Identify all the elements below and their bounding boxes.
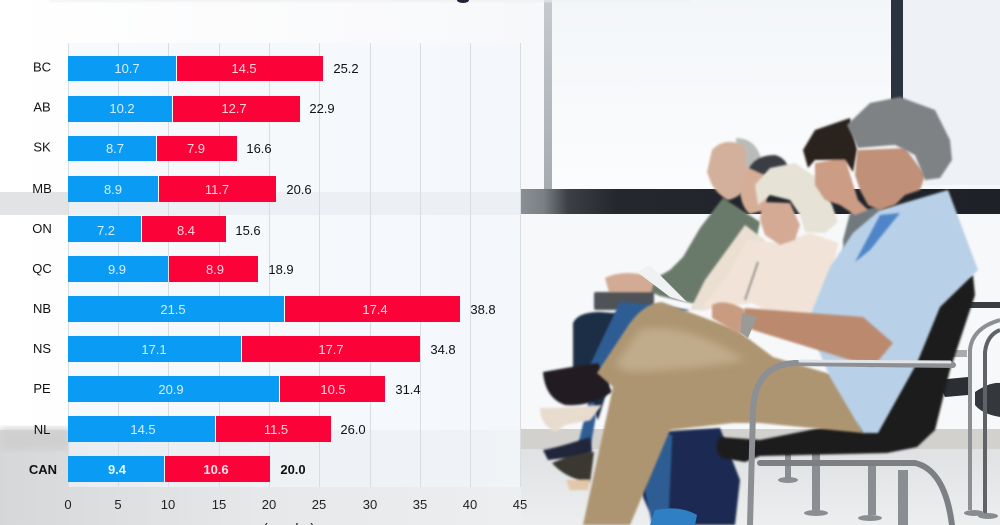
- hair: [847, 97, 952, 180]
- shoes, left: [543, 363, 612, 490]
- row: SK: 7.9: [187, 141, 205, 156]
- row: CAN: [29, 456, 306, 482]
- row: MB: 20.6: [286, 182, 312, 197]
- chair frame: [750, 361, 953, 525]
- title remnant, clipped at top edge: [50, 0, 690, 3]
- x axis labels: 40: [463, 497, 477, 512]
- x axis labels: 15: [212, 497, 226, 512]
- row: QC: 9.9: [108, 262, 126, 277]
- document held: [637, 265, 687, 302]
- x axis labels: 20: [262, 497, 276, 512]
- row: NB: 21.5: [160, 302, 186, 317]
- person: woman with white hair: [700, 163, 838, 322]
- row: QC: QC: [32, 261, 52, 276]
- chair legs, behind: [778, 448, 908, 525]
- row: QC: 8.9: [206, 262, 224, 277]
- hand and watch: [712, 302, 745, 335]
- row: SK: [33, 136, 272, 161]
- floor left: [0, 430, 521, 525]
- x axis labels: 25: [312, 497, 326, 512]
- arm: [740, 308, 893, 367]
- row: PE: 31.4: [395, 382, 421, 397]
- row: NB: NB: [33, 301, 51, 316]
- row: AB: AB: [33, 100, 51, 114]
- row: AB: 12.7: [221, 101, 247, 116]
- row: ON: ON: [32, 221, 52, 236]
- row: PE: 20.9: [158, 382, 184, 397]
- row: SK: 16.6: [246, 141, 272, 156]
- x axis labels: 10: [161, 497, 175, 512]
- background chairs, right: [937, 302, 1000, 519]
- row: CAN: 20.0: [280, 462, 306, 477]
- row: NB: [33, 296, 496, 322]
- sneaker, blue: [650, 508, 697, 525]
- row: MB: [32, 176, 312, 202]
- window mullion, dark: [891, 0, 903, 100]
- row: NL: NL: [34, 422, 50, 437]
- row: NS: NS: [33, 341, 51, 356]
- baseboard: [520, 429, 1000, 449]
- window frame, dark: [520, 189, 1000, 214]
- row: BC: 10.7: [114, 61, 140, 76]
- x axis labels: 30: [363, 497, 377, 512]
- row: NL: 26.0: [340, 422, 366, 437]
- trousers: [583, 302, 863, 525]
- baseboard left: [0, 428, 70, 450]
- window mullion, light: [544, 0, 552, 190]
- grid lines: [68, 43, 520, 487]
- row: ON: 7.2: [97, 223, 115, 238]
- shirt: [807, 190, 978, 433]
- row: QC: 18.9: [268, 262, 294, 277]
- plot background: [68, 43, 521, 487]
- x axis labels: [64, 497, 527, 512]
- row: BC: [33, 56, 359, 81]
- row: AB: [33, 96, 335, 122]
- row: PE: [33, 376, 421, 402]
- row: NL: [34, 416, 366, 442]
- row: NS: 34.8: [430, 342, 456, 357]
- row: NS: 17.7: [318, 342, 344, 357]
- window frame, left faded band: [0, 192, 521, 215]
- person: young man: [803, 118, 885, 272]
- row: MB: 11.7: [205, 182, 229, 197]
- row: CAN: 9.4: [108, 462, 127, 477]
- row: ON: [32, 216, 261, 242]
- row: BC: BC: [33, 60, 51, 74]
- row: MB: 8.9: [104, 182, 122, 197]
- row: CAN: 10.6: [203, 462, 229, 477]
- row: AB: 10.2: [109, 101, 135, 116]
- row: ON: 8.4: [177, 223, 195, 238]
- face: [855, 148, 925, 210]
- row: PE: PE: [33, 381, 51, 396]
- row: BC: 14.5: [231, 61, 257, 76]
- jeans, lower legs: [640, 428, 740, 525]
- row: NL: 14.5: [130, 422, 156, 437]
- row: SK: 8.7: [106, 141, 124, 156]
- row: QC: [32, 256, 294, 282]
- row: SK: SK: [33, 140, 51, 154]
- person: man in blue shirt: [583, 97, 978, 525]
- window panes: [552, 0, 1000, 189]
- chair shell: [716, 275, 975, 462]
- x axis labels: 0: [64, 497, 72, 512]
- row: NS: [33, 336, 456, 362]
- row: NB: 38.8: [470, 302, 496, 317]
- row: MB: MB: [32, 181, 52, 196]
- person: old man in green shirt: [573, 138, 761, 420]
- row: CAN: CAN: [29, 462, 57, 477]
- row: NS: 17.1: [141, 342, 167, 357]
- row: AB: 22.9: [309, 101, 335, 116]
- row: ON: 15.6: [235, 223, 261, 238]
- floor right: [520, 449, 1000, 525]
- row: PE: 10.5: [320, 382, 346, 397]
- x axis labels: 5: [114, 497, 122, 512]
- x axis labels: 45: [513, 497, 527, 512]
- chart panel: [29, 43, 527, 525]
- person: woman with dark hair: [540, 155, 788, 450]
- row: BC: 25.2: [333, 61, 359, 76]
- row: NB: 17.4: [362, 302, 388, 317]
- row: NL: 11.5: [264, 422, 288, 437]
- x axis labels: 35: [413, 497, 427, 512]
